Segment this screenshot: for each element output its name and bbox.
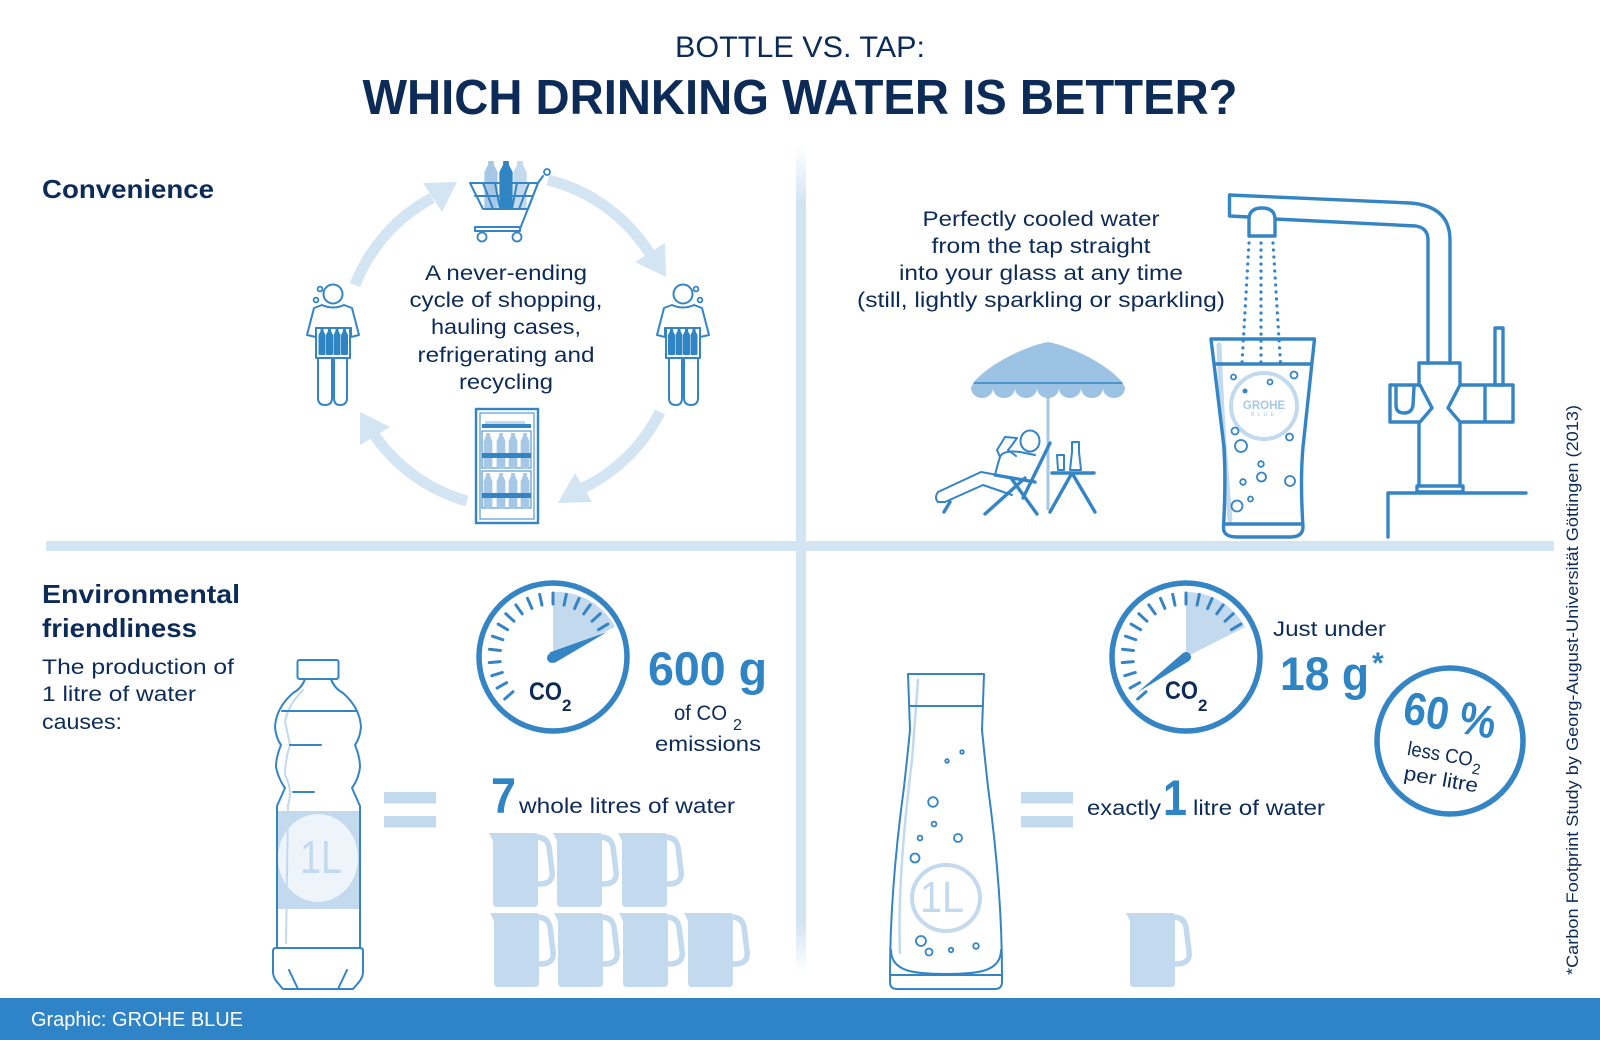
- icon: person carrying case left: [307, 284, 359, 405]
- icon: single jug: [1126, 913, 1189, 987]
- icon: equals sign left: [384, 792, 436, 828]
- text: production intro: causes:: [42, 711, 122, 734]
- icon: person under parasol: [936, 342, 1125, 514]
- stat: exactly 1 litre: exactly: [1087, 797, 1162, 820]
- stat: 7 whole litres: [491, 768, 735, 824]
- callout: 60% less CO2: less CO: [1406, 738, 1474, 771]
- stat: exactly 1 litre: [1087, 770, 1325, 826]
- heading: convenience: Convenience: [42, 174, 214, 204]
- icon: carafe: [890, 674, 1002, 989]
- text: cycle description: refrigerating and: [418, 344, 594, 367]
- chart: bottle CO2 gauge: [479, 583, 627, 731]
- chart: bottle CO2 gauge: 2: [562, 696, 571, 715]
- text: tap description: Perfectly cooled water: [922, 208, 1160, 231]
- icon: equals sign right: [1021, 792, 1073, 828]
- chart: tap CO2 gauge: CO: [1165, 677, 1198, 705]
- footer bar: Graphic: GROHE BLUE: [31, 1009, 243, 1031]
- stat: 18 g: 18 g: [1280, 647, 1369, 700]
- stat: 7 whole litres: whole litres of water: [518, 795, 735, 818]
- title: BOTTLE VS. TAP:: [675, 31, 925, 64]
- text: production intro: [42, 656, 234, 734]
- icon: glass with logo: GROHE: [1243, 400, 1285, 412]
- text: cycle description: hauling cases,: [431, 316, 581, 339]
- title: [362, 31, 1238, 125]
- stat: 600 g: 600 g: [648, 642, 767, 695]
- callout: 60% less CO2: [1377, 668, 1523, 814]
- horizontal divider: [46, 541, 1554, 551]
- stat: exactly 1 litre: litre of water: [1193, 797, 1325, 820]
- text: cycle description: recycling: [459, 371, 553, 394]
- arrow: person right to fridge: [558, 412, 660, 503]
- vertical divider: [796, 146, 806, 972]
- text: tap description: into your glass at any time: [899, 262, 1183, 285]
- text: production intro: The production of: [42, 656, 234, 679]
- icon: plastic bottle: [273, 660, 363, 989]
- arrow: cart to person right: [548, 180, 666, 277]
- callout: 60% less CO2: per litre: [1402, 763, 1480, 797]
- title: WHICH DRINKING WATER IS BETTER?: [362, 71, 1238, 125]
- text: of CO2 emissions: emissions: [655, 733, 761, 756]
- icon: shopping cart: [470, 161, 550, 242]
- text: cycle description: [410, 262, 602, 394]
- icon: water stream: [1242, 243, 1280, 363]
- callout: 60% less CO2: 2: [1471, 761, 1482, 779]
- text: cycle description: cycle of shopping,: [410, 289, 602, 312]
- icon: glass with logo: [1211, 339, 1314, 537]
- stat: 7 whole litres: 7: [491, 768, 516, 824]
- text: of CO2 emissions: [655, 702, 761, 756]
- chart: tap CO2 gauge: [1112, 583, 1260, 731]
- panel: tap convenience: [857, 195, 1526, 537]
- text: production intro: 1 litre of water: [42, 683, 196, 706]
- text: cycle description: A never-ending: [425, 262, 587, 285]
- arrow: fridge to person left: [360, 412, 467, 501]
- text: of CO2 emissions: of CO: [674, 702, 727, 725]
- icon: glass with logo: BLUE: [1251, 412, 1277, 418]
- arrow: person left to cart: [355, 182, 457, 285]
- text: of CO2 emissions: 2: [733, 717, 742, 734]
- callout: 60% less CO2: 60 %: [1400, 681, 1500, 749]
- icon: carafe: 1L: [920, 873, 964, 922]
- icon: refrigerator: [476, 409, 538, 523]
- text: tap description: (still, lightly sparkling or sparkling): [857, 289, 1225, 312]
- text: tap description: [857, 208, 1225, 312]
- text: tap description: from the tap straight: [932, 235, 1151, 258]
- chart: tap CO2 gauge: 2: [1198, 696, 1207, 715]
- stat: exactly 1 litre: 1: [1163, 770, 1187, 826]
- icon: faucet: [1230, 195, 1526, 537]
- source footnote: *Carbon Footprint Study by Georg-August-Universität Göttingen (2013): [1564, 405, 1582, 975]
- footer bar: [0, 998, 1600, 1040]
- stat: 18 g: *: [1372, 647, 1384, 680]
- icon: plastic bottle: 1L: [300, 831, 342, 883]
- text: just under: Just under: [1273, 618, 1386, 641]
- heading: environmental friendliness: Environmental: [42, 579, 240, 609]
- chart: bottle CO2 gauge: CO: [529, 678, 562, 706]
- icon: seven water jugs: [489, 833, 747, 987]
- heading: environmental friendliness: friendliness: [42, 613, 197, 643]
- panel: bottle convenience cycle: [307, 161, 709, 523]
- heading: environmental friendliness: [42, 579, 240, 643]
- icon: person carrying case right: [657, 284, 709, 405]
